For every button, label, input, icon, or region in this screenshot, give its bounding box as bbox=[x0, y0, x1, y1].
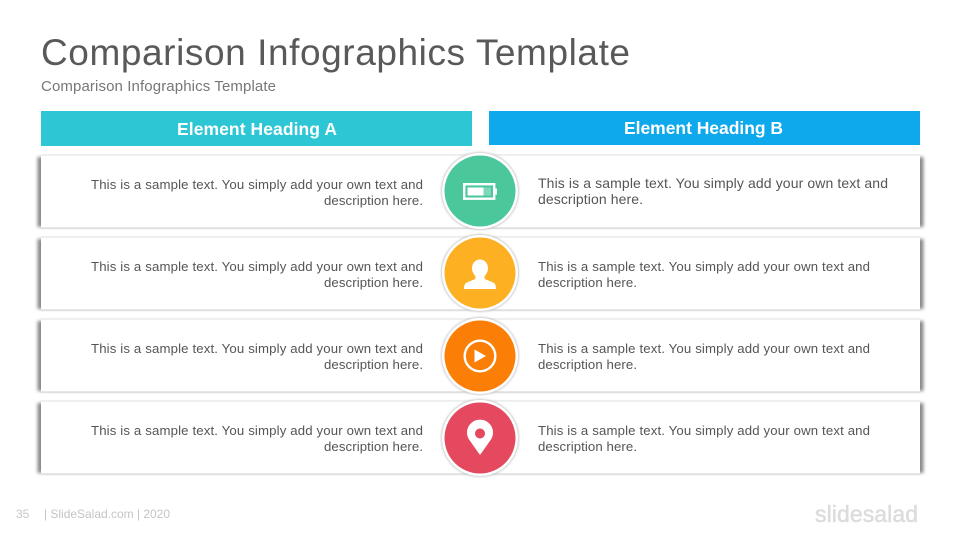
panel: row 4 bbox=[38, 400, 924, 474]
panel: row 3 bbox=[38, 318, 924, 392]
panel: row 2: This is a sample text. You simply add your own text and bbox=[538, 259, 870, 274]
panel: row 1: description here. bbox=[538, 191, 643, 207]
footer text: | SlideSalad.com | 2020 bbox=[44, 507, 170, 521]
panel: row 1 bbox=[38, 154, 924, 228]
panel: row 3: description here. bbox=[538, 357, 637, 372]
heading A: Element Heading A bbox=[177, 119, 337, 139]
title: Comparison Infographics Template bbox=[41, 32, 630, 73]
panel: row 2: description here. bbox=[324, 275, 423, 290]
panel: row 1: This is a sample text. You simply add your own text and bbox=[91, 177, 423, 192]
page number: 35 bbox=[16, 507, 30, 521]
heading B: Element Heading B bbox=[624, 118, 783, 138]
logo: slidesalad bbox=[815, 501, 918, 527]
panel: row 2 bbox=[38, 236, 924, 310]
icon: location pin bbox=[441, 399, 519, 477]
subtitle: Comparison Infographics Template bbox=[41, 78, 276, 95]
panel: row 3: This is a sample text. You simply add your own text and bbox=[91, 341, 423, 356]
icon: play bbox=[441, 317, 519, 395]
panel: row 2: description here. bbox=[538, 275, 637, 290]
panel: row 4: This is a sample text. You simply add your own text and bbox=[91, 423, 423, 438]
panel: row 1: description here. bbox=[324, 193, 423, 208]
panel: row 4: description here. bbox=[538, 439, 637, 454]
icon: person bbox=[441, 234, 519, 312]
panel: row 2: This is a sample text. You simply add your own text and bbox=[91, 259, 423, 274]
heading B bbox=[489, 111, 920, 145]
panel: row 4: description here. bbox=[324, 439, 423, 454]
heading A bbox=[41, 111, 472, 146]
panel: row 3: description here. bbox=[324, 357, 423, 372]
panel: row 3: This is a sample text. You simply add your own text and bbox=[538, 341, 870, 356]
panel: row 4: This is a sample text. You simply add your own text and bbox=[538, 423, 870, 438]
icon: battery bbox=[441, 152, 519, 230]
panel: row 1: This is a sample text. You simply add your own text and bbox=[538, 175, 888, 191]
